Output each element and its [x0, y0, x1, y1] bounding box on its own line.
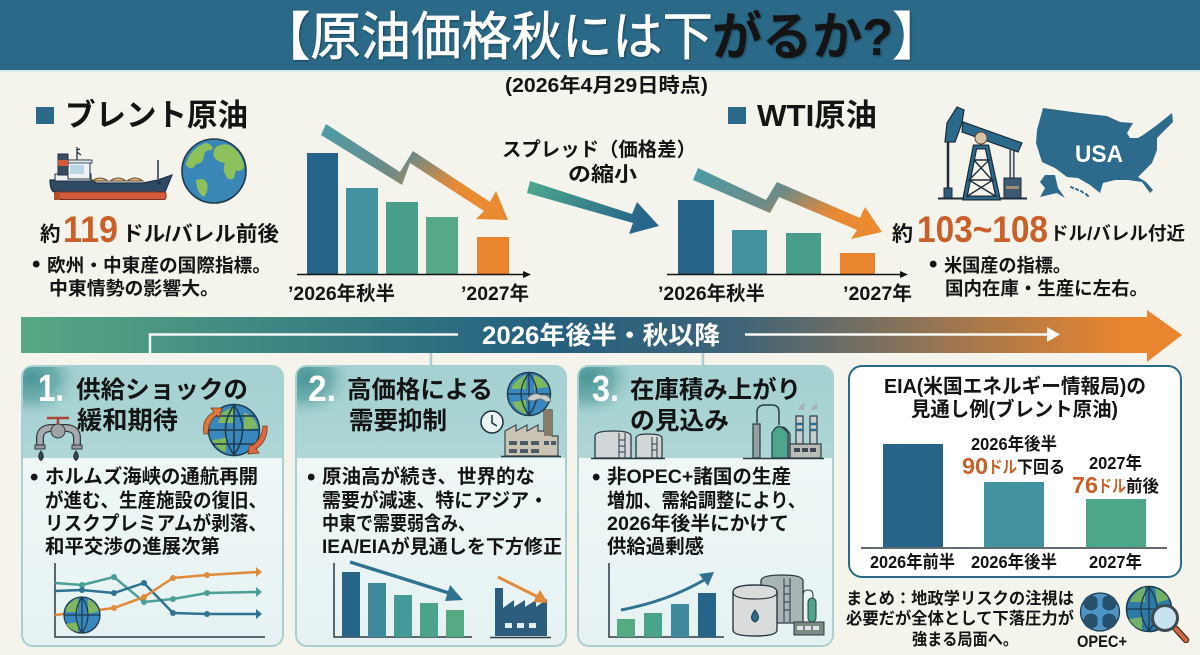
heading: EIA: [884, 375, 1146, 421]
bar chart: EIA: 2027年: [1089, 552, 1142, 572]
text: Brent description: 欧州・中東産の国際指標。: [47, 255, 271, 276]
title: 】: [892, 9, 944, 67]
bar chart: cause 3: [609, 563, 724, 637]
text: cause 3 body: 増加、需給調整により、: [607, 490, 806, 512]
bar chart: WTI forecast: ’2027年: [843, 282, 912, 305]
heading: cause 3: の見込み: [630, 407, 729, 435]
arrow: timeline band: [21, 310, 1182, 366]
arrow: timeline band: 2026年後半・秋以降: [482, 322, 720, 350]
callout: 2026 second half: 2026年後半: [971, 434, 1057, 454]
price: Brent: [40, 209, 279, 250]
heading: cause 1: [38, 368, 248, 435]
bar chart: cause 2: [334, 562, 472, 637]
heading: cause 2: [308, 368, 493, 435]
line chart: cause 1: [55, 563, 265, 637]
callout: 2027: 76: [1072, 472, 1098, 498]
arrow: Brent falling: [321, 124, 508, 220]
title: [260, 9, 944, 67]
header banner: [0, 0, 1200, 72]
arrow: spread: [527, 181, 659, 234]
icon: globe, clock and factory: [481, 372, 561, 456]
text: cause 1 body: が進む、生産施設の復旧、: [45, 489, 267, 512]
text: summary: [846, 588, 1074, 649]
text: cause 3 body: 非OPEC+諸国の生産: [607, 466, 791, 488]
text: Brent description: 中東情勢の影響大。: [49, 278, 219, 299]
text: spread narrowing: スプレッド（価格差）: [502, 139, 696, 161]
text: summary: 必要だが全体として下落圧力が: [846, 608, 1074, 628]
title: がるか?: [712, 9, 893, 67]
bar chart: WTI forecast: [658, 168, 912, 305]
text: cause 3 body: [592, 464, 806, 558]
text: spread narrowing: [502, 139, 696, 186]
callout: 2026 second half: 下回る: [1017, 458, 1065, 477]
text: cause 2 body: [307, 464, 562, 558]
panel: cause 2: [295, 365, 567, 647]
icon: faucet: [35, 417, 82, 460]
icon: USA map: USA: [1075, 141, 1123, 168]
heading: cause 2: 高価格による: [347, 376, 493, 404]
bar chart: EIA: 2026年後半: [971, 552, 1057, 572]
title: 【原油価格秋には下: [260, 9, 713, 67]
panel: WTI crude: [658, 98, 1186, 305]
price: Brent: 約: [40, 223, 60, 246]
text: Brent description: •: [32, 251, 40, 278]
price: WTI: [892, 209, 1186, 250]
icon: tanker ship: [50, 147, 172, 200]
text: cause 2 body: IEA/EIAが見通しを下方修正: [322, 535, 562, 558]
callout: 2027: 2027年: [1089, 453, 1142, 473]
callout: 2026 second half: 90: [962, 453, 988, 479]
bar chart: EIA: 2026年前半: [870, 552, 955, 572]
callout: 2026 second half: [962, 434, 1065, 479]
arrow: WTI falling: [693, 168, 882, 239]
heading: cause 3: 在庫積み上がり: [630, 375, 801, 404]
icon: earth globe: [182, 139, 246, 203]
price: Brent: ドル/バレル前後: [122, 223, 279, 246]
text: cause 3 body: 2026年後半にかけて: [607, 512, 789, 535]
text: cause 2 body: 中東で需要弱含み、: [322, 513, 475, 535]
text: cause 3 body: 供給過剰感: [607, 535, 704, 558]
callout: 2026 second half: ドル: [988, 458, 1017, 477]
panel: cause 3: [577, 365, 834, 647]
text: WTI description: [929, 251, 1148, 299]
callout: 2027: ドル: [1098, 477, 1126, 496]
icon: oil pump jack: [938, 107, 1027, 198]
heading: EIA: 見通し例(ブレント原油): [911, 397, 1118, 421]
bar chart: Brent forecast: ’2027年: [461, 282, 529, 305]
text: cause 1 body: [30, 464, 267, 558]
price: WTI: 103~108: [917, 209, 1048, 250]
callout: 2027: [1072, 453, 1159, 498]
heading: cause 2: 2.: [308, 368, 336, 409]
bar chart: EIA: [861, 444, 1167, 572]
icon: factory with falling arrow: [490, 577, 551, 638]
heading: EIA: EIA(米国エネルギー情報局)の: [884, 375, 1146, 398]
text: summary: まとめ：地政学リスクの注視は: [846, 588, 1074, 608]
bar chart: WTI forecast: ’2026年秋半: [658, 282, 765, 305]
text: WTI description: 国内在庫・生産に左右。: [945, 278, 1148, 299]
icon: oil tanks: [733, 575, 824, 636]
heading: WTI: WTI原油: [757, 98, 877, 133]
price: WTI: ドル/バレル付近: [1050, 223, 1186, 244]
heading: cause 1: 供給ショックの: [76, 376, 248, 404]
panel: Brent crude: [32, 98, 279, 299]
text: cause 2 body: 需要が減速、特にアジア・: [322, 489, 548, 512]
icon: globe with arrows: [203, 404, 267, 456]
date note: (2026年4月29日時点): [505, 74, 708, 97]
price: WTI: 約: [892, 223, 913, 246]
heading: cause 3: 3.: [592, 368, 619, 409]
text: WTI description: 米国産の指標。: [944, 255, 1071, 276]
icon: globe with magnifier: [1126, 586, 1186, 640]
text: spread narrowing: の縮小: [568, 163, 637, 186]
text: cause 1 body: 和平交渉の進展次第: [45, 536, 220, 558]
text: WTI description: •: [929, 251, 937, 278]
text: cause 3 body: •: [592, 464, 600, 491]
heading: cause 3: [592, 368, 801, 435]
heading: cause 1: 1.: [38, 368, 64, 410]
icon: OPEC+ logo: OPEC+: [1077, 633, 1127, 651]
icon: storage tanks: [591, 431, 665, 458]
text: cause 1 body: リスクプレミアムが剥落、: [45, 512, 267, 535]
icon: refinery: [743, 403, 824, 458]
heading: cause 1: 緩和期待: [77, 407, 178, 435]
heading: cause 2: 需要抑制: [349, 407, 447, 435]
text: cause 1 body: ホルムズ海峡の通航再開: [45, 465, 258, 488]
icon: small globe: [64, 597, 100, 633]
panel: cause 1: [21, 365, 284, 647]
text: cause 1 body: •: [30, 464, 38, 491]
icon: OPEC+ logo: [1077, 593, 1127, 651]
bar chart: Brent forecast: ’2026年秋半: [288, 282, 395, 305]
icon: USA map: [1036, 108, 1173, 198]
callout: 2027: 前後: [1126, 476, 1159, 496]
text: summary: 強まる局面へ。: [912, 630, 1018, 649]
text: cause 2 body: 原油高が続き、世界的な: [322, 465, 535, 488]
price: Brent: 119: [63, 209, 118, 250]
heading: Brent: ブレント原油: [65, 98, 248, 133]
text: Brent description: [32, 251, 271, 299]
bar chart: Brent forecast: [288, 124, 531, 305]
panel: EIA outlook: [849, 366, 1181, 577]
text: cause 2 body: •: [307, 464, 315, 491]
